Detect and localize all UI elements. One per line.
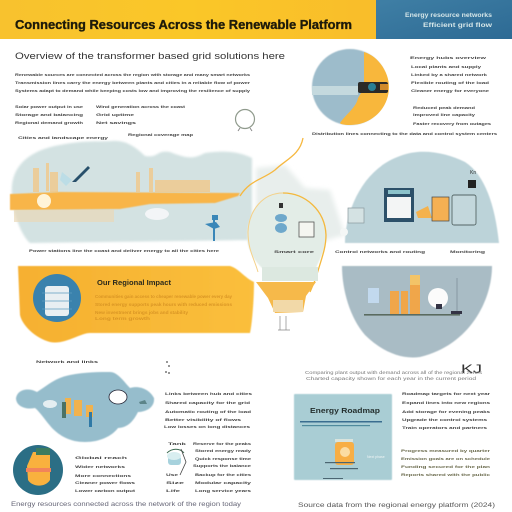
caption under dome two	[305, 370, 483, 381]
text beside cylinder: Modular capacity	[195, 480, 252, 485]
header note: Efficient grid flow	[423, 22, 493, 29]
orange band	[10, 192, 240, 210]
icon: orange block	[416, 206, 432, 218]
caption row above landscape: Cities and landscape energy	[18, 135, 109, 140]
text beside cloud: Shared capacity for the grid	[165, 400, 251, 405]
right text top: Improved line capacity	[413, 112, 476, 117]
text beside globe: More connections	[75, 473, 132, 478]
icon: round database	[33, 274, 81, 322]
text beside cylinder: Use	[166, 472, 179, 477]
short text columns: Net savings	[96, 120, 137, 125]
right text block: Upgrade the control systems	[402, 417, 488, 422]
icon: white node	[109, 390, 127, 404]
text beside globe: Cleaner power flows	[75, 480, 136, 485]
caption row above landscape: Regional coverage map	[128, 132, 194, 137]
bulb screw lines	[278, 316, 290, 330]
icon: white bulb	[428, 288, 448, 308]
short text columns: Solar power output in use	[15, 104, 84, 109]
bulb base	[256, 282, 316, 313]
icon: box in bulb	[299, 222, 314, 237]
card base	[323, 462, 358, 479]
text beside cloud: Automatic routing of the load	[165, 409, 252, 414]
icon: telescope	[72, 166, 90, 182]
short text columns: Storage and balancing	[15, 112, 84, 117]
header note: Energy resource networks	[405, 12, 492, 19]
text beside globe: Wider networks	[75, 464, 126, 469]
right text block: Roadmap targets for next year	[402, 391, 491, 396]
right text top: Linked by a shared network	[411, 72, 488, 77]
caption row above landscape: Distribution lines connecting to the data and control system centers	[312, 131, 498, 136]
short text columns: Grid uptime	[96, 112, 135, 117]
short text columns	[15, 104, 186, 125]
icon: small ring	[236, 110, 254, 131]
bulb water band	[262, 267, 318, 281]
icon: cylinder	[167, 449, 186, 475]
text beside cylinder: Size	[166, 480, 186, 485]
right coloured text block: Reports shared with the public	[401, 472, 491, 477]
callout heading: Our Regional Impact	[97, 278, 171, 287]
right text top: Flexible routing of the load	[411, 80, 490, 85]
callout text: Communities gain access to cheaper renewable power every day	[95, 294, 232, 299]
panel: landscape	[10, 141, 252, 243]
subtitle: Overview of the transformer based grid solutions here	[15, 51, 285, 61]
text beside globe: Lower carbon output	[75, 488, 136, 493]
text beside globe	[75, 455, 136, 493]
card lines	[300, 421, 382, 426]
right coloured text block: Funding secured for the plan	[401, 464, 491, 469]
caption under dome two: Charted capacity shown for each year in the current period	[306, 376, 477, 381]
short text columns: Regional demand growth	[15, 120, 84, 125]
icon: orange capsule	[335, 439, 354, 465]
captions under dome one: Monitoring	[450, 249, 486, 254]
panel: dome one: Kn	[470, 170, 476, 176]
text beside cloud: Links between hub and cities	[165, 391, 253, 396]
callout text: New investment brings jobs and stability	[95, 310, 189, 315]
small marks	[165, 361, 170, 374]
intro text block: Systems adapt to demand while keeping costs low and improving the resilience of supply	[15, 88, 251, 93]
caption below landscape: Power stations line the coast and deliver energy to all the cities here	[29, 248, 220, 253]
connector line to bulb	[240, 138, 303, 196]
text beside cylinder: Backup for the cities	[195, 472, 252, 477]
captions under dome one	[274, 249, 486, 254]
right coloured text block: Progress measured by quarter	[401, 448, 491, 453]
text beside cylinder: Quick response time	[195, 456, 252, 461]
icon: figure	[89, 412, 92, 427]
icon: cloud	[145, 208, 169, 220]
icon: storage tanks	[452, 195, 476, 225]
bulb illustration	[247, 192, 326, 330]
right text top: Faster recovery from outages	[413, 121, 492, 126]
footer left: Energy resources connected across the network of the region today	[11, 501, 242, 508]
panel: dome two	[342, 266, 492, 358]
icon: sun	[37, 194, 51, 208]
text beside cylinder: Supports the balance	[193, 463, 252, 468]
panel: square chart card: Next phase	[367, 455, 385, 459]
icon: figure in bulb	[275, 203, 287, 233]
left small caption: Network and links	[36, 359, 99, 364]
callout text: Stored energy supports peak hours with reduced emissions	[95, 302, 233, 307]
text beside cylinder: Life	[166, 488, 181, 493]
panel: yellow callout	[18, 266, 254, 342]
right text top: Energy hubs overview	[410, 55, 488, 60]
short text columns: Wind generation across the coast	[96, 104, 186, 109]
title: Connecting Resources Across the Renewable Platform	[15, 17, 352, 32]
icon: white dot	[340, 228, 348, 236]
intro text block	[15, 72, 251, 93]
pale backdrop behind bulb	[256, 165, 345, 242]
panel: dome one	[340, 152, 499, 243]
icon: triangle	[139, 400, 147, 404]
icon: bars	[65, 398, 93, 417]
right text block	[402, 391, 491, 430]
skyline	[33, 163, 210, 192]
icon: mast	[456, 278, 458, 313]
text beside cloud: Better visibility of flows	[165, 417, 242, 422]
intro text block: Renewable sources are connected across the region with storage and many smart networks	[15, 72, 251, 77]
panel: cloud network	[16, 372, 154, 442]
caption row above landscape	[18, 131, 498, 140]
panel: square chart card	[294, 394, 392, 480]
right text top: Reduced peak demand	[413, 105, 476, 110]
right text top: Cleaner energy for everyone	[411, 88, 490, 93]
text beside cylinder	[166, 441, 252, 493]
bar chart	[390, 275, 420, 315]
captions under dome one: Control networks and routing	[335, 249, 426, 254]
right text block: Train operators and partners	[402, 425, 488, 430]
circle illustration	[312, 49, 389, 125]
icon: device	[358, 82, 388, 93]
icon: globe thumb	[13, 445, 63, 495]
text beside cylinder: Reserve for the peaks	[193, 441, 252, 446]
caption under dome two: Comparing plant output with demand across all of the regional zones	[305, 370, 483, 375]
icon: cloud	[43, 400, 57, 408]
header note	[405, 12, 493, 29]
icon: screen	[384, 188, 414, 222]
right coloured text block	[401, 448, 491, 477]
header banner	[0, 0, 512, 39]
text beside cylinder: Tank	[168, 441, 188, 446]
label KJ: KJ	[461, 362, 482, 376]
callout text: Long term growth	[95, 316, 150, 321]
card heading: Energy Roadmap	[310, 408, 380, 415]
right text top: Local plants and supply	[411, 64, 482, 69]
right text block: Expand lines into new regions	[402, 400, 491, 405]
right coloured text block: Emission goals are on schedule	[401, 456, 491, 461]
footer right: Source data from the regional energy platform (2024)	[298, 502, 495, 509]
text beside cloud	[164, 391, 253, 429]
right text top	[410, 55, 492, 126]
intro text block: Transmission lines carry the energy between plants and cities in a reliable flow of power	[15, 80, 251, 85]
text beside cylinder: Stored energy ready	[195, 448, 252, 453]
text beside cylinder: Long service years	[195, 488, 252, 493]
captions under dome one: Smart core	[274, 249, 315, 254]
text beside cloud: Low losses on long distances	[164, 424, 251, 429]
icon: cup	[368, 288, 379, 303]
text beside globe: Global reach	[75, 455, 128, 460]
callout text	[95, 294, 233, 321]
right text block: Add storage for evening peaks	[402, 409, 491, 414]
icon: blue figure	[205, 215, 220, 241]
